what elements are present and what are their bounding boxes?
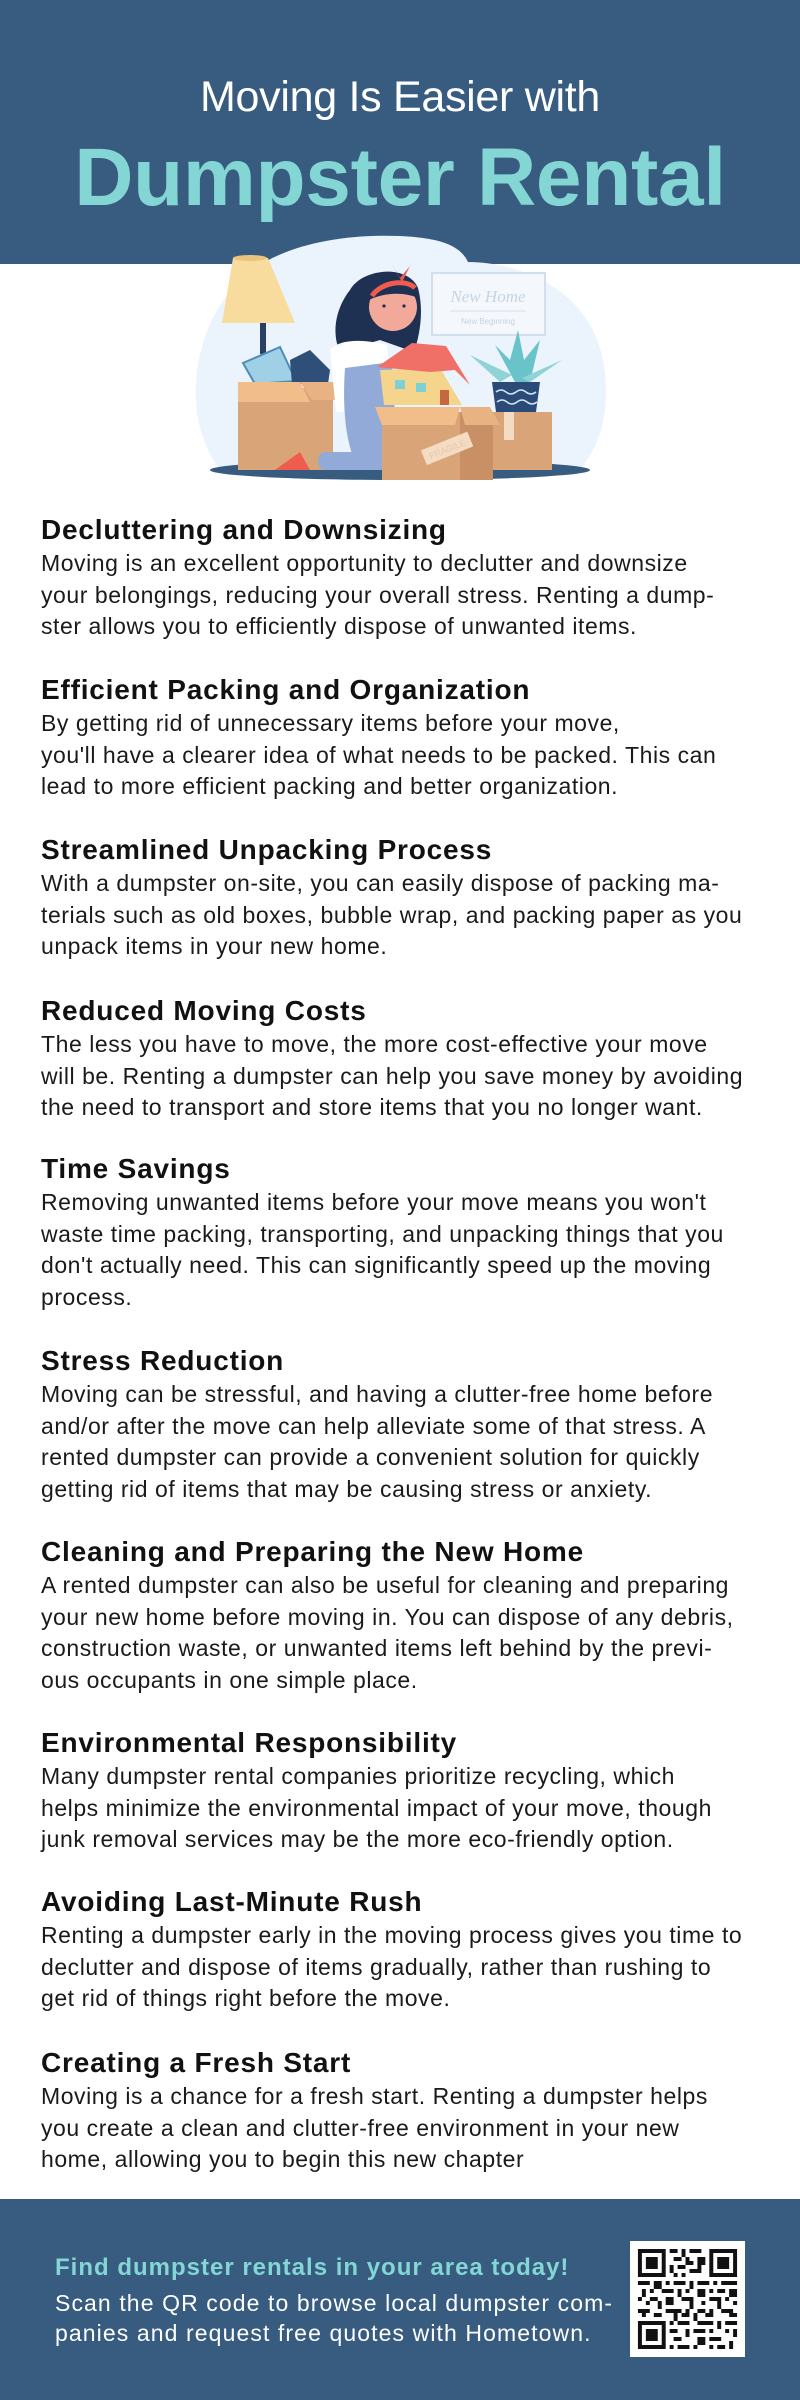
header band — [0, 0, 800, 264]
woman — [275, 265, 421, 470]
section: Environmental Responsibility: Many dumpster rental companies prioritize recycling, which — [41, 1763, 675, 1789]
section: Cleaning and Preparing the New Home: construction waste, or unwanted items left behind by the previ- — [41, 1635, 712, 1661]
section: Cleaning and Preparing the New Home: ous occupants in one simple place. — [41, 1667, 418, 1693]
section: Stress Reduction — [41, 1345, 713, 1502]
section: Environmental Responsibility — [40, 1727, 712, 1852]
section: Decluttering and Downsizing: Decluttering and Downsizing — [41, 514, 447, 545]
section: Time Savings: Removing unwanted items before your move means you won't — [41, 1189, 706, 1215]
section: Cleaning and Preparing the New Home: your new home before moving in. You can dispose of any debris, — [41, 1604, 734, 1630]
front box with fragile label — [375, 407, 500, 480]
section: Stress Reduction: Moving can be stressful, and having a clutter-free home before — [41, 1381, 713, 1407]
section: Environmental Responsibility: junk removal services may be the more eco-friendly option. — [41, 1826, 674, 1852]
section: Efficient Packing and Organization: lead to more efficient packing and better organization. — [41, 773, 618, 799]
section: Efficient Packing and Organization: By getting rid of unnecessary items before your move, — [41, 710, 620, 736]
footer body text: panies and request free quotes with Hometown. — [55, 2320, 592, 2346]
section: Decluttering and Downsizing: your belongings, reducing your overall stress. Renting a dump- — [41, 582, 714, 608]
section: Cleaning and Preparing the New Home — [41, 1536, 734, 1693]
section: Streamlined Unpacking Process: Streamlined Unpacking Process — [41, 834, 492, 865]
footer body text — [55, 2290, 613, 2346]
section: Streamlined Unpacking Process: unpack items in your new home. — [41, 933, 387, 959]
section: Avoiding Last-Minute Rush: Avoiding Last-Minute Rush — [41, 1886, 422, 1917]
footer body text: Scan the QR code to browse local dumpster com- — [55, 2290, 613, 2316]
book — [290, 350, 330, 384]
section: Avoiding Last-Minute Rush: declutter and dispose of items gradually, rather than rushing to — [41, 1954, 711, 1980]
section: Stress Reduction: rented dumpster can provide a convenient solution for quickly — [41, 1444, 700, 1470]
section: Reduced Moving Costs: the need to transport and store items that you no longer want. — [41, 1094, 703, 1120]
section: Efficient Packing and Organization — [41, 674, 716, 799]
section: Environmental Responsibility: helps minimize the environmental impact of your move, though — [41, 1795, 712, 1821]
plant — [470, 330, 562, 412]
shadow ellipse — [210, 460, 590, 480]
section: Time Savings: don't actually need. This can significantly speed up the moving — [41, 1252, 711, 1278]
section: Reduced Moving Costs: Reduced Moving Costs — [41, 995, 367, 1026]
section: Environmental Responsibility: Environmental Responsibility — [41, 1727, 457, 1758]
left box — [238, 382, 340, 470]
section: Streamlined Unpacking Process — [41, 834, 742, 959]
sign: New Beginning — [461, 317, 515, 326]
section: Avoiding Last-Minute Rush: Renting a dumpster early in the moving process gives you time to — [41, 1922, 742, 1948]
section: Streamlined Unpacking Process: With a dumpster on-site, you can easily dispose of packing ma- — [41, 870, 719, 896]
section: Stress Reduction: getting rid of items that may be causing stress or anxiety. — [41, 1476, 652, 1502]
section: Time Savings: Time Savings — [41, 1153, 231, 1184]
section: Creating a Fresh Start — [41, 2047, 708, 2172]
blob background — [196, 236, 606, 470]
title line 2: Dumpster Rental — [74, 132, 726, 223]
section: Creating a Fresh Start: you create a clean and clutter-free environment in your new — [41, 2115, 679, 2141]
toy house — [377, 343, 470, 405]
section: Efficient Packing and Organization: Efficient Packing and Organization — [41, 674, 530, 705]
section: Avoiding Last-Minute Rush — [41, 1886, 742, 2011]
section: Reduced Moving Costs: The less you have to move, the more cost-effective your move — [41, 1031, 708, 1057]
section: Stress Reduction: and/or after the move can help alleviate some of that stress. A — [41, 1413, 706, 1439]
section: Reduced Moving Costs: will be. Renting a dumpster can help you save money by avoiding — [41, 1063, 743, 1089]
section: Efficient Packing and Organization: you'll have a clearer idea of what needs to be packed. This can — [41, 742, 716, 768]
QR code — [630, 2241, 745, 2357]
section: Decluttering and Downsizing — [41, 514, 714, 639]
section: Decluttering and Downsizing: Moving is an excellent opportunity to declutter and downsize — [41, 550, 688, 576]
lamp — [222, 255, 295, 354]
footer call to action — [0, 2199, 800, 2400]
section: Avoiding Last-Minute Rush: get rid of things right before the move. — [41, 1985, 450, 2011]
section: Streamlined Unpacking Process: terials such as old boxes, bubble wrap, and packing paper as you — [41, 902, 742, 928]
section: Creating a Fresh Start: home, allowing you to begin this new chapter — [41, 2146, 524, 2172]
section: Reduced Moving Costs — [41, 995, 743, 1120]
section: Time Savings: waste time packing, transporting, and unpacking things that you — [41, 1221, 724, 1247]
title line 1: Moving Is Easier with — [200, 73, 600, 121]
section: Cleaning and Preparing the New Home: Cleaning and Preparing the New Home — [41, 1536, 584, 1567]
section: Creating a Fresh Start: Moving is a chance for a fresh start. Renting a dumpster helps — [41, 2083, 708, 2109]
footer heading: Find dumpster rentals in your area today! — [55, 2254, 569, 2281]
sign: New Home — [449, 287, 526, 306]
section: Stress Reduction: Stress Reduction — [41, 1345, 284, 1376]
illustration: woman packing boxes — [196, 236, 606, 480]
section: Creating a Fresh Start: Creating a Fresh Start — [41, 2047, 351, 2078]
section: Time Savings: process. — [41, 1284, 132, 1310]
section: Time Savings — [41, 1153, 724, 1310]
section: Decluttering and Downsizing: ster allows you to efficiently dispose of unwanted items. — [41, 613, 637, 639]
picture frame — [243, 347, 296, 384]
sign — [432, 273, 545, 335]
right box — [493, 412, 552, 470]
section: Cleaning and Preparing the New Home: A rented dumpster can also be useful for cleaning and preparing — [41, 1572, 729, 1598]
front box with fragile label: FRAGILE — [428, 437, 467, 461]
